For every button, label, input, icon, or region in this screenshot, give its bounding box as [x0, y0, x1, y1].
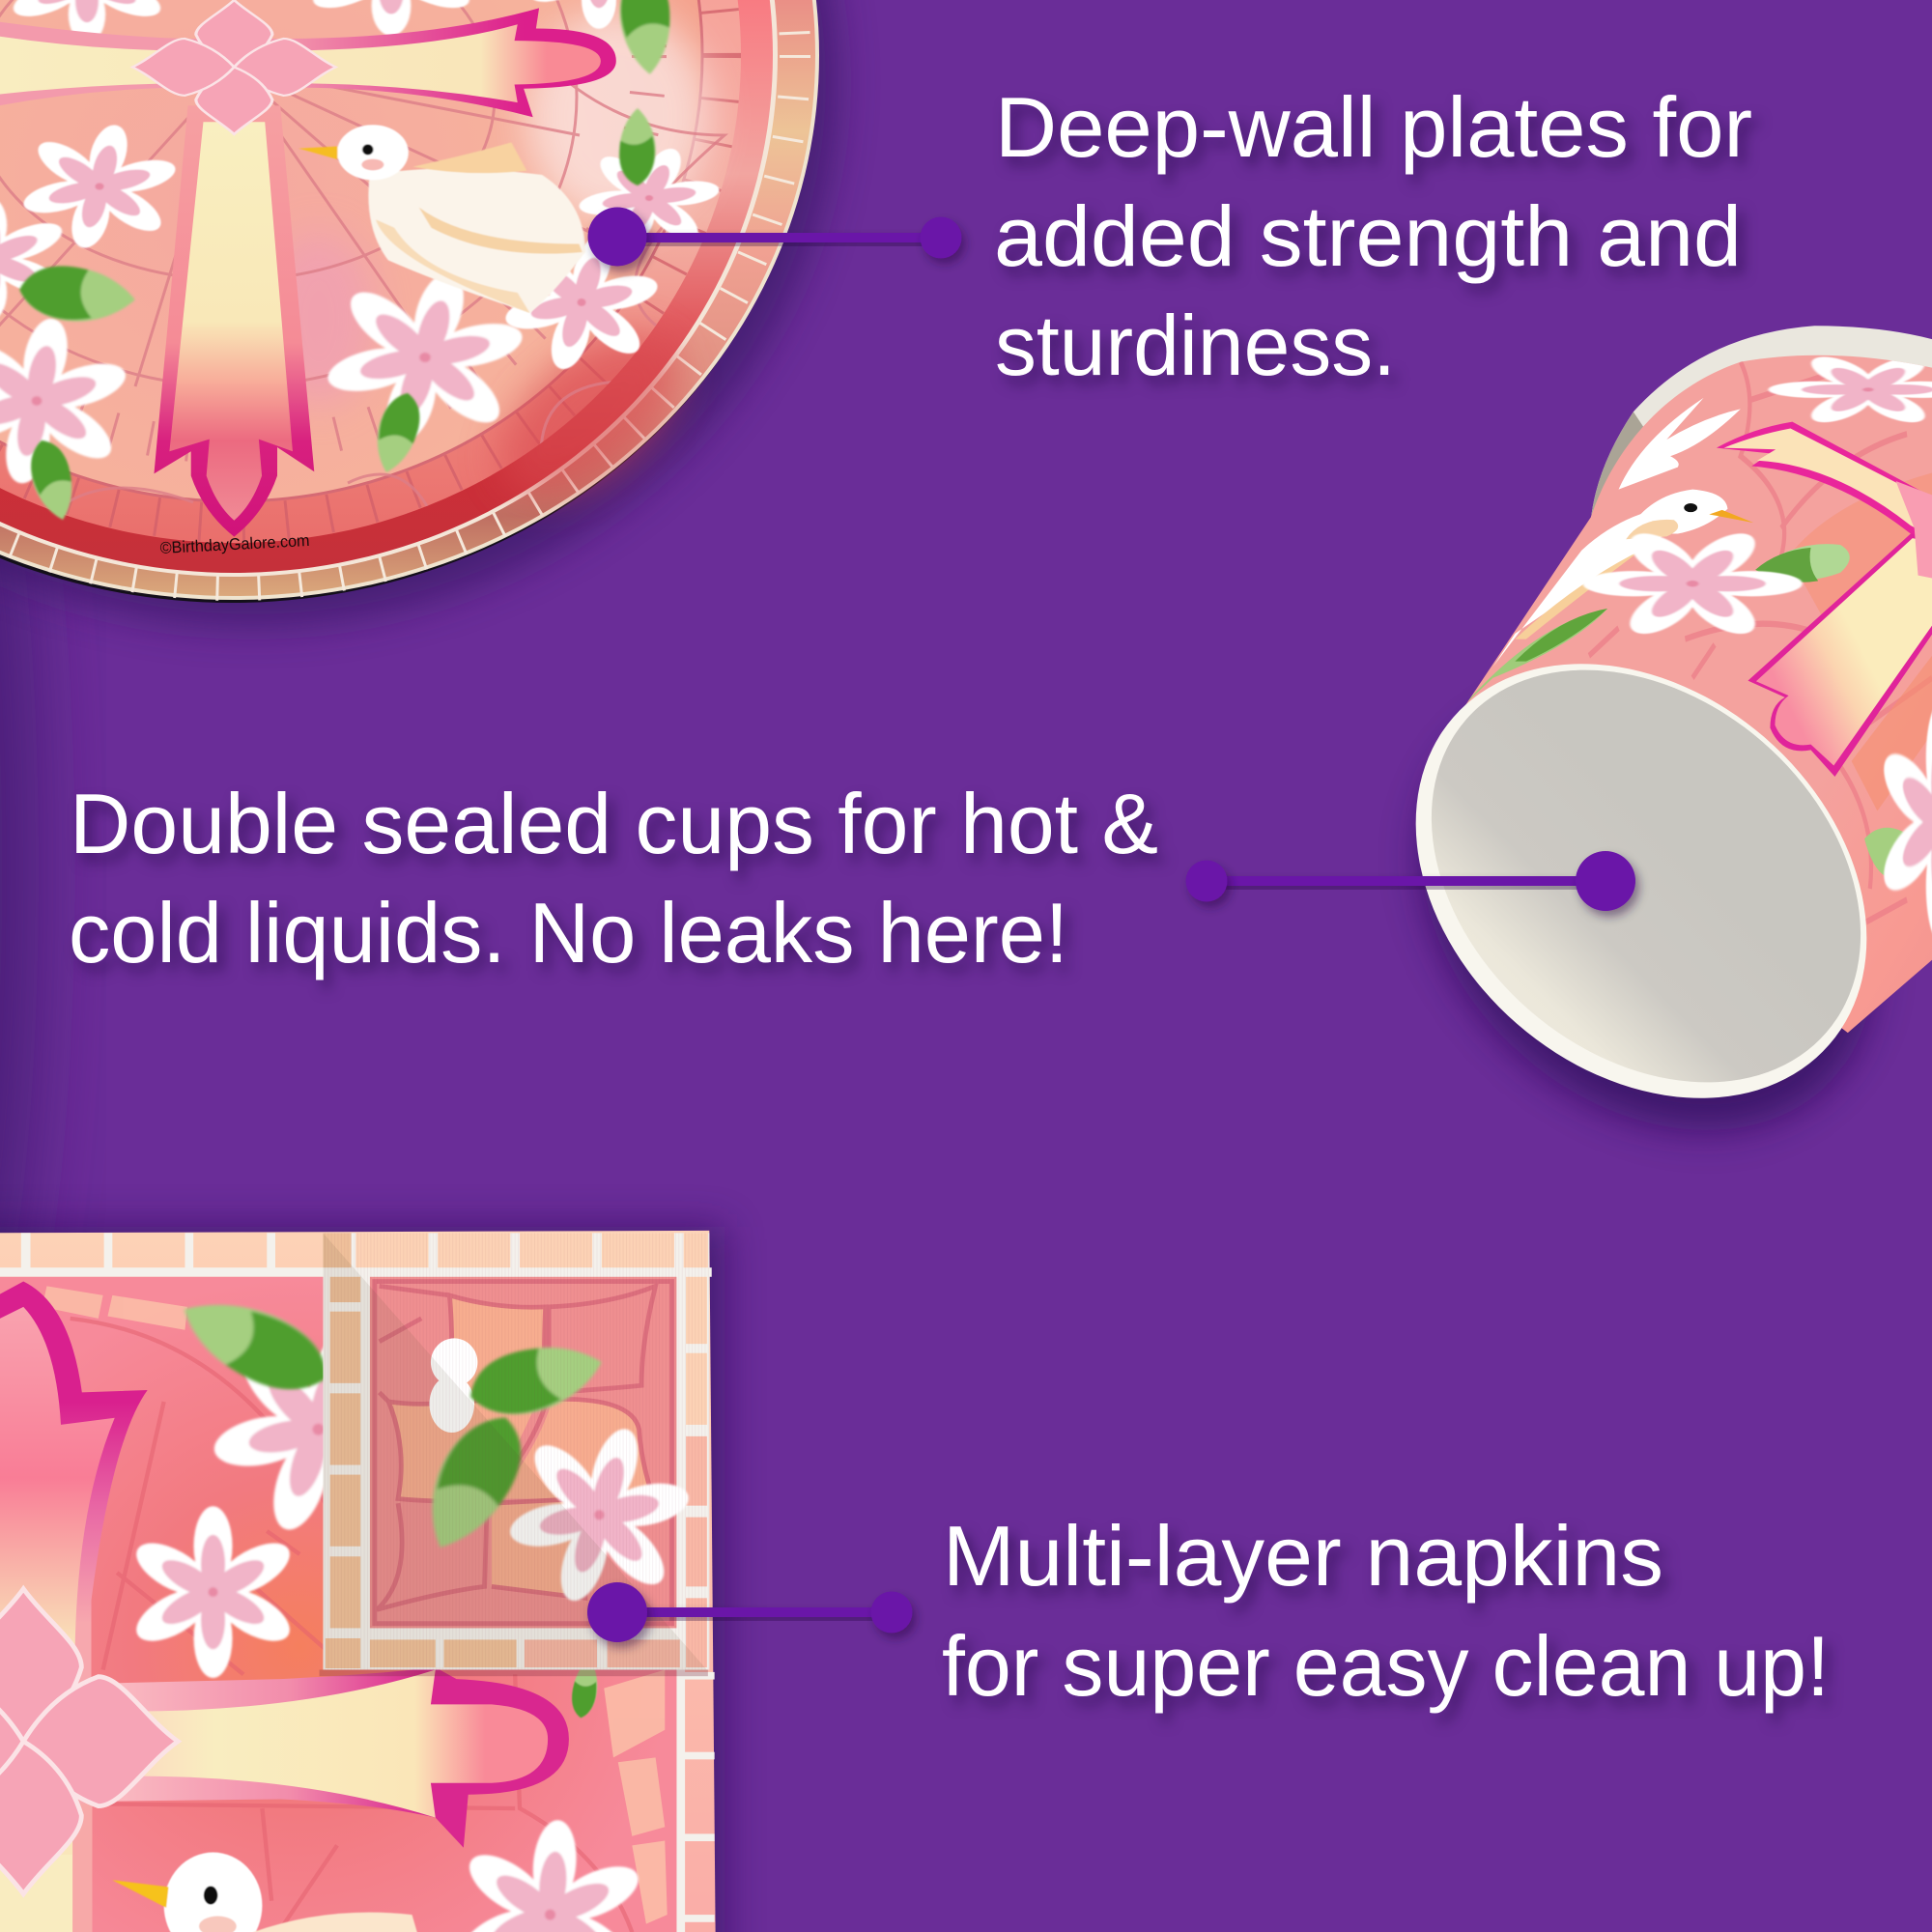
panel: cup	[1406, 326, 1932, 1146]
heading: plates text: added strength and	[994, 188, 1742, 284]
plate body	[0, 0, 819, 603]
callout: cups	[1186, 851, 1635, 911]
cup art: bird	[1492, 490, 1753, 667]
heading: plates text	[994, 79, 1752, 393]
heading: cups text: Double sealed cups for hot &	[70, 776, 1158, 871]
connector line	[633, 1607, 889, 1617]
panel: plate	[0, 0, 838, 627]
small dot	[871, 1592, 912, 1633]
cup art: leaves	[1755, 544, 1850, 581]
heading: cups text: cold liquids. No leaks here!	[69, 885, 1068, 980]
cup rim and body	[1450, 326, 1932, 1033]
heading: plates text: Deep-wall plates for	[995, 79, 1752, 175]
callout: plates	[587, 207, 962, 267]
connector line	[633, 233, 932, 242]
cup art: flowers	[1545, 339, 1932, 942]
napkin shadow	[0, 1227, 724, 1932]
cup art: cross	[1717, 422, 1932, 777]
heading: napkins text	[942, 1508, 1830, 1714]
plate dove	[298, 125, 585, 313]
large dot	[1576, 851, 1635, 911]
plate shadow	[0, 0, 838, 627]
plate copyright: ©BirthdayGalore.com	[159, 531, 310, 557]
plate cross	[0, 0, 616, 537]
heading: cups text	[69, 776, 1158, 980]
stained glass lines	[0, 0, 724, 522]
napkin cross	[0, 1282, 569, 1932]
small dot	[920, 216, 962, 259]
heading: napkins text: for super easy clean up!	[942, 1618, 1830, 1714]
plate flowers and leaves	[0, 0, 739, 525]
large dot	[587, 1582, 647, 1642]
cup base	[1329, 575, 1932, 1187]
napkin bird	[112, 1853, 421, 1932]
napkin base and border	[0, 1231, 716, 1932]
napkin fold flap	[320, 1233, 712, 1676]
cup shadow	[1335, 607, 1932, 1219]
callout: napkins	[587, 1582, 912, 1642]
napkin flowers and leaves	[128, 1281, 652, 1932]
heading: napkins text: Multi-layer napkins	[943, 1508, 1663, 1604]
small dot	[1186, 860, 1227, 902]
connector line	[1212, 876, 1584, 886]
panel: napkin	[0, 1227, 724, 1932]
heading: plates text: sturdiness.	[995, 298, 1396, 393]
large dot	[587, 207, 647, 267]
